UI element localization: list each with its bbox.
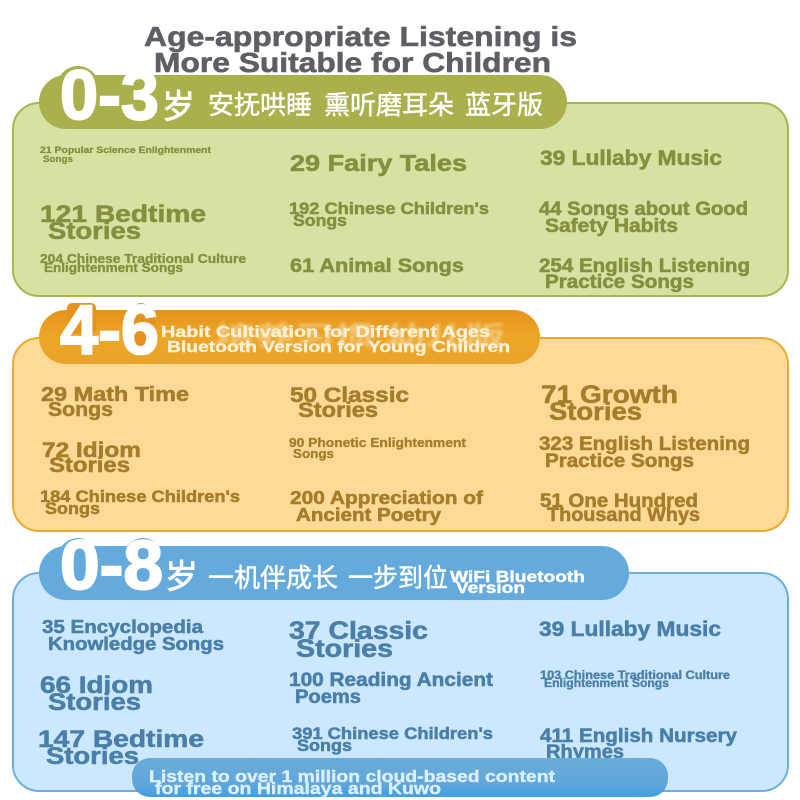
item: 200 Appreciation of Ancient Poetry	[290, 487, 484, 525]
panel: ages 0-8	[13, 526, 788, 791]
item: 21 Popular Science: Songs	[43, 154, 73, 165]
item: 204 Chinese Traditional Culture: Enlightenment Songs	[44, 261, 183, 275]
header pill 4-6	[39, 291, 540, 369]
header pill 0-8: WiFi Bluetooth	[450, 569, 585, 586]
item: 204 Chinese Traditional Culture: 204 Chinese Traditional Culture	[40, 252, 246, 266]
item: 90 Phonetic Enlightenment	[289, 436, 467, 461]
header pill 0-8: 0-8	[60, 526, 163, 604]
header pill 0-3: 0-3	[60, 56, 159, 134]
item: 411 English Nursery Rhymes: Rhymes	[546, 742, 624, 763]
header pill 0-8: Version	[456, 580, 525, 597]
bottom callout pill	[132, 758, 668, 798]
header pill 4-6: 培养习惯 幼儿版	[215, 321, 505, 351]
item: 103 Chinese Traditional Culture: Enlightenment Songs	[544, 678, 669, 690]
item: 29 Math Time Songs: 29 Math Time	[41, 383, 189, 406]
item: 51 One Hundred Thousand Whys	[540, 491, 700, 526]
item: 411 English Nursery Rhymes	[540, 726, 737, 763]
item: 50 Classic Stories: 50 Classic	[290, 384, 409, 407]
title	[144, 21, 577, 78]
item: 184 Chinese Children's Songs	[40, 487, 240, 518]
item: 323 English Listening	[539, 433, 750, 472]
item: 51 One Hundred Thousand Whys: Thousand Whys	[547, 505, 700, 526]
item: 100 Reading Ancient Poems: 100 Reading Ancient	[289, 670, 494, 691]
header pill 0-3: 岁	[162, 88, 195, 125]
item: 29 Math Time Songs: Songs	[48, 398, 113, 421]
item: 72 Idiom Stories: 72 Idiom	[42, 439, 141, 462]
item: 50 Classic Stories: Stories	[298, 399, 378, 422]
header pill 0-8: 一机伴成长	[208, 563, 338, 593]
item: 90 Phonetic Enlightenment: Songs	[293, 447, 334, 461]
item: 184 Chinese Children's Songs: 184 Chinese Children's	[40, 487, 240, 506]
item: 192 Chinese Children's Songs: 192 Chinese Children's	[289, 199, 489, 218]
item: 71 Growth Stories: Stories	[549, 398, 642, 426]
item: 192 Chinese Children's Songs: Songs	[293, 211, 347, 230]
item: 29 Fairy Tales: 29 Fairy Tales	[290, 150, 467, 176]
item: 39 Lullaby Music: 39 Lullaby Music	[539, 618, 721, 641]
item: 147 Bedtime Stories: 147 Bedtime	[38, 726, 204, 753]
header pill 0-3: 蓝牙版	[465, 90, 543, 120]
item: 103 Chinese Traditional Culture	[540, 670, 730, 690]
panel background green	[13, 103, 788, 296]
title: Age-appropriate Listening is	[144, 21, 577, 52]
item: 71 Growth Stories: 71 Growth	[541, 381, 678, 409]
item: 37 Classic Stories	[289, 617, 428, 663]
item: 37 Classic Stories: 37 Classic	[289, 617, 428, 645]
title: More Suitable for Children	[154, 47, 551, 78]
item: 35 Encyclopedia Knowledge Songs: 35 Encyclopedia	[42, 616, 204, 637]
item: 323 English Listening: 323 English Listening	[539, 433, 750, 455]
item: 147 Bedtime Stories: Stories	[46, 743, 139, 770]
item: 71 Growth Stories	[541, 381, 678, 426]
item: 254 English Listening: 254 English Listening	[539, 255, 750, 277]
item: 184 Chinese Children's Songs: Songs	[45, 499, 100, 518]
item: 37 Classic Stories: Stories	[296, 635, 393, 663]
panel: ages 0-3	[13, 56, 788, 296]
item: 121 Bedtime Stories: 121 Bedtime	[40, 201, 206, 228]
item: 200 Appreciation of Ancient Poetry: Ancient Poetry	[296, 504, 442, 525]
item: 44 Songs about Good Safety Habits	[539, 199, 748, 237]
item: 35 Encyclopedia Knowledge Songs: Knowledge Songs	[48, 633, 224, 654]
item: 72 Idiom Stories	[42, 439, 141, 477]
panel background blue	[13, 573, 788, 791]
item: 21 Popular Science	[40, 145, 212, 165]
item: 44 Songs about Good Safety Habits: 44 Songs about Good	[539, 199, 748, 220]
header pill 0-8	[39, 526, 629, 604]
item: 51 One Hundred Thousand Whys: 51 One Hundred	[540, 491, 698, 512]
header pill 4-6: Habit Cultivation for Different Ages	[161, 324, 490, 341]
item: 411 English Nursery Rhymes: 411 English Nursery	[540, 726, 737, 747]
item: 121 Bedtime Stories: Stories	[48, 218, 141, 245]
item: 192 Chinese Children's Songs	[289, 199, 489, 230]
item: 66 Idiom Stories	[40, 672, 153, 716]
item: 29 Math Time Songs	[41, 383, 189, 421]
header pill 0-8: 岁	[165, 558, 198, 595]
item: 254 English Listening	[539, 255, 750, 293]
item: 44 Songs about Good Safety Habits: Safety Habits	[545, 216, 678, 237]
item: 72 Idiom Stories: Stories	[49, 454, 130, 477]
item: 39 Lullaby Music: 39 Lullaby Music	[540, 147, 722, 170]
header pill 0-8: 一步到位	[348, 563, 448, 593]
item: 254 English Listening: Practice Songs	[545, 271, 694, 293]
item: 66 Idiom Stories: 66 Idiom	[40, 672, 153, 699]
item: 147 Bedtime Stories	[38, 726, 204, 770]
bottom callout pill: for free on Himalaya and Kuwo	[155, 779, 441, 798]
panel: ages 4-6	[13, 291, 788, 531]
item: 100 Reading Ancient Poems: Poems	[295, 687, 361, 708]
item: 391 Chinese Children's Songs	[292, 724, 493, 755]
item: 323 English Listening: Practice Songs	[545, 450, 694, 472]
item: 61 Animal Songs: 61 Animal Songs	[290, 255, 464, 277]
item: 100 Reading Ancient Poems	[289, 670, 494, 708]
item: 391 Chinese Children's Songs: Songs	[297, 736, 352, 755]
item: 50 Classic Stories	[290, 384, 409, 422]
item: 90 Phonetic Enlightenment: 90 Phonetic Enlightenment	[289, 436, 467, 450]
item: 66 Idiom Stories: Stories	[48, 689, 141, 716]
item: 391 Chinese Children's Songs: 391 Chinese Children's	[292, 724, 493, 743]
item: 121 Bedtime Stories	[40, 201, 206, 245]
header pill 4-6: Bluetooth Version for Young Children	[167, 339, 510, 356]
bottom callout pill: Listen to over 1 million cloud-based content	[149, 767, 555, 786]
item: 200 Appreciation of Ancient Poetry: 200 Appreciation of	[290, 487, 484, 508]
item: 35 Encyclopedia Knowledge Songs	[42, 616, 224, 654]
item: 21 Popular Science: 21 Popular Science Enlightenment	[40, 145, 212, 156]
header pill 0-3	[39, 56, 567, 134]
header pill 0-3: 安抚哄睡	[208, 90, 312, 120]
header pill 4-6: 4-6	[60, 291, 159, 369]
item: 204 Chinese Traditional Culture	[40, 252, 246, 275]
header pill 0-3: 熏听磨耳朵	[324, 90, 454, 120]
item: 103 Chinese Traditional Culture: 103 Chinese Traditional Culture	[540, 670, 730, 682]
panel background orange	[13, 338, 788, 531]
